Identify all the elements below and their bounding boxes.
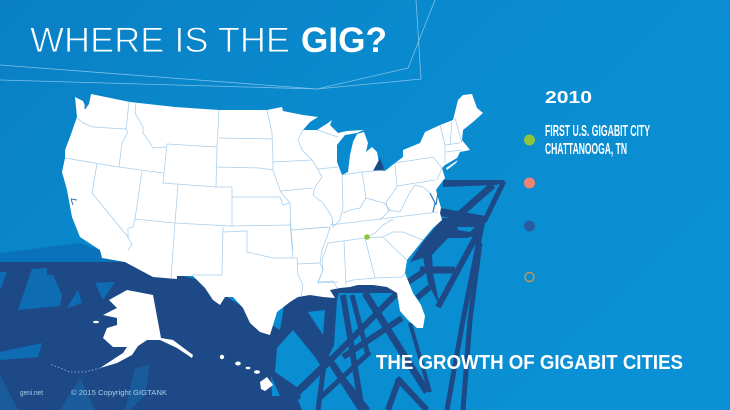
network: fiber lattice xyxy=(0,180,505,410)
title: GIG? xyxy=(301,21,387,60)
legend: green marker xyxy=(524,134,535,146)
legend year: 2010 xyxy=(545,87,592,107)
footer: copyright: © 2015 Copyright GIGTANK xyxy=(71,388,167,397)
legend text: FIRST U.S. GIGABIT CITY xyxy=(545,123,650,140)
frame lines xyxy=(0,0,435,89)
legend: ring marker xyxy=(525,272,534,282)
bays xyxy=(430,192,438,212)
map: contiguous US xyxy=(62,94,483,335)
title: WHERE IS THE xyxy=(30,21,290,60)
footer: site: geni.net xyxy=(20,388,44,397)
legend: blue marker xyxy=(524,220,535,232)
city marker: Chattanooga xyxy=(364,234,370,240)
legend text xyxy=(545,123,650,158)
lake erie xyxy=(373,158,385,171)
legend text: CHATTANOOGA, TN xyxy=(545,141,627,158)
map: Hawaii xyxy=(220,355,273,391)
long island xyxy=(446,160,458,170)
subtitle: THE GROWTH OF GIGABIT CITIES xyxy=(376,352,683,374)
land outline xyxy=(62,94,483,335)
legend: salmon marker xyxy=(524,178,535,188)
state borders xyxy=(65,102,462,297)
map: Alaska xyxy=(50,290,193,372)
